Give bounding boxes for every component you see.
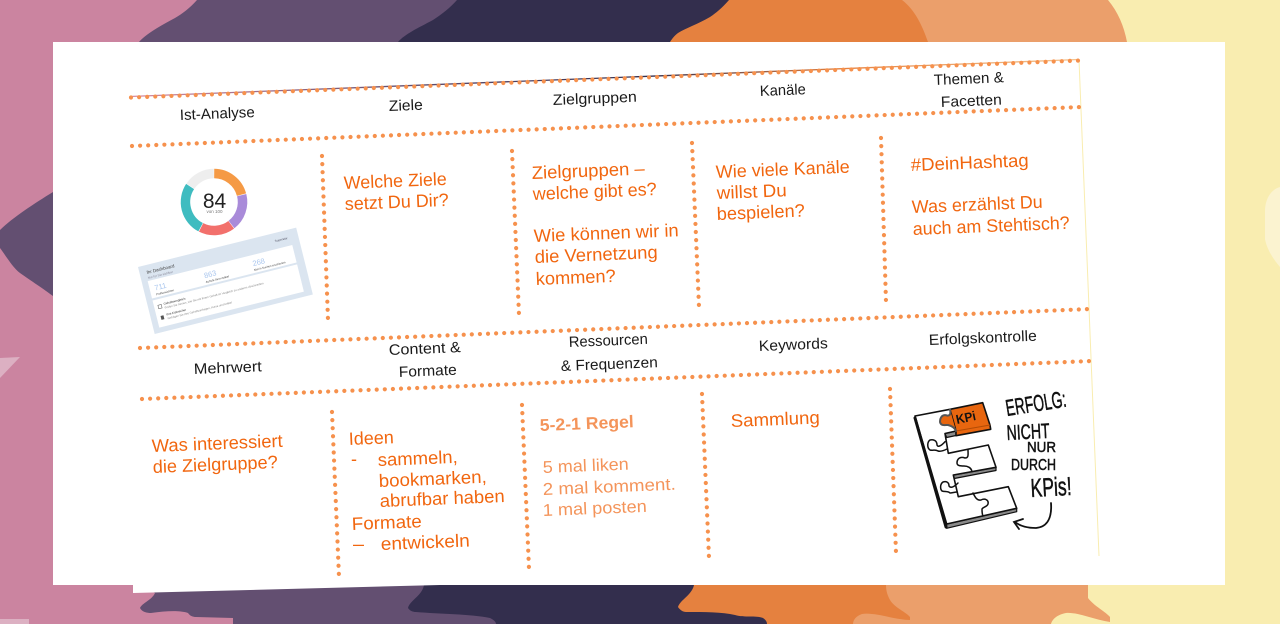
heading: Ressourcen & Frequenzen: & Frequenzen — [560, 354, 658, 375]
text: Zielgruppen: welche gibt es? — [531, 179, 657, 204]
handwritten note: ERFOLG: — [1004, 386, 1068, 421]
text: Zielgruppen: kommen? — [535, 266, 616, 289]
heading: Content & Formate — [388, 339, 461, 381]
chart: score donut — [185, 174, 243, 231]
illustration: KPI puzzle E — [915, 403, 1017, 528]
heading: Themen & Facetten: Themen & — [933, 69, 1004, 89]
heading: Erfolgskontrolle: Erfolgskontrolle — [928, 328, 1037, 349]
dashboard screenshot: 268 — [252, 256, 266, 268]
puzzle: white E face — [915, 409, 1017, 524]
text: Mehrwert — [151, 431, 283, 477]
dashboard screenshot: 863 — [203, 268, 217, 280]
text: Kanäle: Wie viele Kanäle — [715, 157, 850, 182]
label: KPI on puzzle piece: KPi — [955, 408, 977, 427]
text: Zielgruppen — [531, 158, 679, 289]
dashboard screenshot — [138, 228, 313, 334]
puzzle: top notch — [940, 409, 956, 431]
text: Ideen und Formate: Ideen — [348, 427, 394, 449]
text: Ideen und Formate: – — [353, 534, 364, 554]
text: Mehrwert: Was interessiert — [151, 431, 283, 456]
dashboard screenshot: 711 — [154, 281, 167, 292]
heading: Ziele: Ziele — [388, 97, 423, 115]
text: Kanäle — [715, 157, 850, 224]
text: Welche Ziele — [343, 169, 449, 214]
text: Hashtag: Was erzählst Du — [911, 192, 1043, 217]
handwritten note: KPis! — [1030, 471, 1072, 503]
text: Kanäle: bespielen? — [716, 200, 805, 224]
dashboard screenshot: Verfolgen Sie Ihre Gehaltsanfragen, Kurse und Artikel — [167, 300, 233, 320]
heading: Ressourcen & Frequenzen — [560, 331, 658, 375]
heading: Ressourcen & Frequenzen: Ressourcen — [568, 331, 648, 351]
heading: Content & Formate: Content & — [388, 339, 461, 359]
text: Zielgruppen: die Vernetzung — [534, 242, 658, 267]
puzzle: KPI piece lip — [956, 425, 990, 431]
heading: Ist-Analyse: Ist-Analyse — [179, 104, 255, 124]
text: Ideen und Formate: sammeln, — [377, 447, 458, 470]
text: Zielgruppen: Zielgruppen – — [531, 158, 645, 183]
text: 5-2-1 Regel — [539, 412, 676, 520]
handwritten note: NICHT — [1006, 420, 1050, 445]
text: 5-2-1 Regel: 1 mal posten — [542, 497, 647, 520]
dashboard screenshot: Aufrufe Ihrer Artikel — [205, 274, 230, 284]
text: Ideen und Formate: entwickeln — [380, 530, 470, 554]
text: 5-2-1 Regel: 5-2-1 Regel — [539, 412, 634, 435]
heading: Keywords: Keywords — [758, 335, 828, 355]
text: Hashtag: #DeinHashtag — [910, 150, 1029, 175]
heading: Kanäle: Kanäle — [759, 81, 806, 100]
text: Ideen und Formate: Formate — [351, 511, 422, 534]
text: Welche Ziele: setzt Du Dir? — [344, 190, 449, 214]
puzzle: joints — [928, 440, 988, 516]
arrow: to puzzle — [1014, 503, 1051, 529]
puzzle: spine thickness — [915, 418, 946, 527]
dashboard screenshot: Nur für Sie sichtbar — [147, 270, 173, 280]
handwritten note: NUR — [1027, 439, 1056, 456]
text: Welche Ziele: Welche Ziele — [343, 169, 447, 193]
dashboard screenshot: Prüfen Sie heraus, wie Sie mit Ihrem Gehalt im Vergleich zu anderen abschneiden — [164, 281, 264, 310]
text: Ideen und Formate: abrufbar haben — [379, 486, 505, 511]
text: Ideen und Formate: - — [351, 449, 357, 469]
handwritten note — [1004, 386, 1072, 503]
text: Ideen und Formate — [348, 427, 505, 554]
heading: Content & Formate: Formate — [398, 362, 457, 381]
text: Ideen und Formate: bookmarken, — [378, 467, 487, 491]
dashboard screenshot: Ihr Dashboard — [146, 263, 175, 275]
puzzle: gray side faces — [945, 431, 1017, 528]
text: Mehrwert: die Zielgruppe? — [152, 452, 278, 477]
dashboard screenshot: Gehaltsvergleich — [163, 296, 186, 306]
text: 5-2-1 Regel: 2 mal komment. — [542, 475, 676, 499]
dashboard screenshot: Profilansichten — [156, 288, 175, 296]
dashboard screenshot: Ihre Eisbrecher — [166, 308, 187, 316]
dashboard screenshot: Superstar — [274, 236, 288, 243]
puzzle: orange KPI piece — [950, 403, 991, 436]
text: Hashtag — [910, 150, 1070, 239]
text: Zielgruppen: Wie können wir in — [533, 220, 679, 246]
dotted grid lines — [131, 60, 1092, 577]
heading: Themen & Facetten — [933, 69, 1004, 111]
text: Hashtag: auch am Stehtisch? — [912, 213, 1070, 239]
text: 5-2-1 Regel: 5 mal liken — [542, 455, 629, 477]
text: Sammlung: Sammlung — [730, 407, 820, 431]
heading: Zielgruppen: Zielgruppen — [552, 89, 637, 109]
text: Kanäle: willst Du — [715, 180, 787, 203]
chart: score donut: von 100 — [206, 209, 223, 214]
handwritten note: DURCH — [1011, 457, 1056, 474]
dashboard screenshot: Mal in Suchen erschienen — [254, 260, 286, 272]
chart: score donut: 84 — [203, 190, 226, 213]
heading: Mehrwert: Mehrwert — [193, 358, 263, 378]
heading: Themen & Facetten: Facetten — [940, 92, 1002, 111]
